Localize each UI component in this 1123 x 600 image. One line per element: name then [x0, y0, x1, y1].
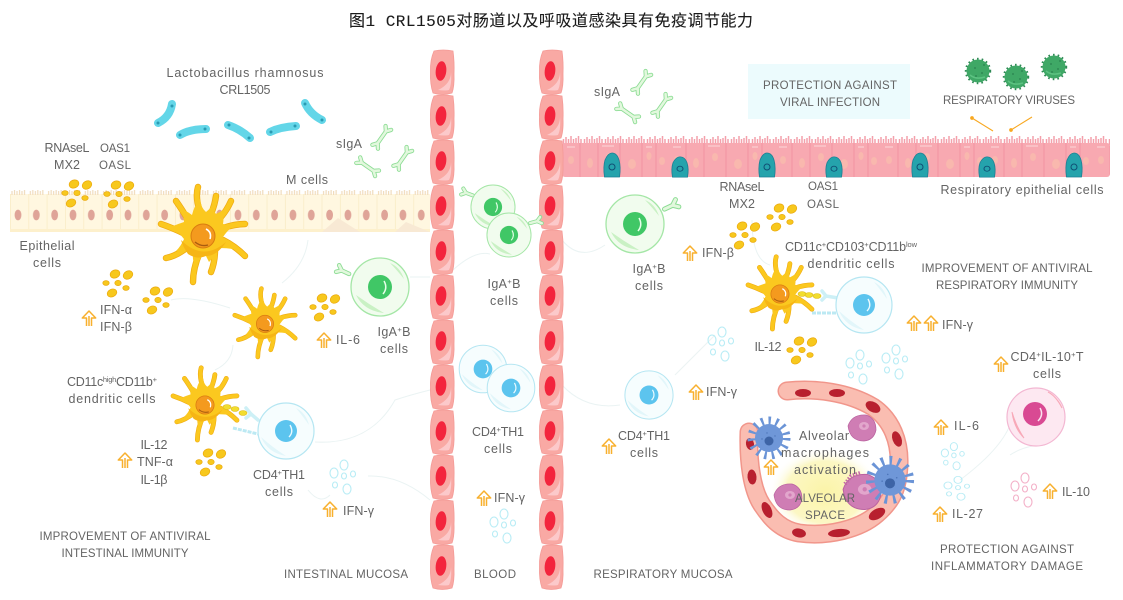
label: alveolar macrophages activation: [781, 429, 869, 477]
heading: improvement of antiviral intestinal immunity: INTESTINAL IMMUNITY: [62, 548, 189, 560]
label: IL-10: [1043, 484, 1090, 499]
label: alveolar macrophages activation: Alveolar: [799, 429, 849, 443]
icons: T cells in blood: [459, 345, 535, 412]
icon: CD4+ IL-10+ T cell: [1007, 388, 1065, 446]
label: CD4+ TH1 cells intestinal: TH1: [282, 468, 305, 482]
label: CD11c high CD11b+ dendritic cells: +: [153, 375, 158, 384]
synapse: dendritic cell and T cell: [173, 368, 314, 459]
label: IL-6: [317, 333, 360, 348]
heading: improvement of antiviral respiratory immunity: [922, 263, 1093, 292]
label: CD4+ TH1 cells intestinal: +: [278, 468, 282, 477]
icon: IgA B cell respiratory: [606, 195, 679, 253]
label: alveolar macrophages activation: activation: [794, 463, 856, 477]
label: IgA+ B cells intestinal: +: [397, 325, 402, 334]
label: respiratory epithelial cells: Respiratory epithelial cells: [940, 183, 1104, 197]
label: IFN-alpha IFN-beta: [82, 303, 132, 334]
label: CD4+ IL-10+ T cells: CD4: [1010, 350, 1036, 364]
label: CD11c+ CD103+ CD11b low dendritic cells: CD103: [826, 240, 864, 254]
alveolar wall: [749, 390, 899, 534]
label: CD11c+ CD103+ CD11b low dendritic cells: dendritic cells: [808, 257, 894, 271]
label: IL-12 TNF-alpha IL-1beta: TNF-α: [137, 455, 173, 469]
label: IFN-gamma blood: [477, 491, 526, 506]
icon: IL-10 rings: [1011, 473, 1036, 507]
icon: T cell respiratory: [625, 371, 673, 419]
title: 图1 CRL1505对肠道以及呼吸道感染具有免疫调节能力: [349, 12, 753, 31]
heading: improvement of antiviral respiratory immunity: IMPROVEMENT OF ANTIVIRAL: [922, 263, 1093, 275]
label: RNAseL MX2 respiratory: RNAseL: [720, 180, 765, 194]
icons: IgA B cells in blood: [461, 185, 542, 257]
cytokines: IL-12 intestinal: [196, 448, 227, 478]
icon: IFN-gamma rings blood: [490, 509, 516, 543]
label: IgA+ B cells blood: cells: [490, 294, 518, 308]
label: CD4+ TH1 cells intestinal: cells: [265, 485, 293, 499]
label: CD4+ TH1 cells intestinal: CD4: [253, 468, 278, 482]
arrows: virus entry: [971, 117, 1032, 131]
heading: intestinal mucosa: INTESTINAL MUCOSA: [284, 569, 408, 581]
label: IgA+ B cells respiratory: +: [652, 262, 657, 271]
label: IgA+ B cells respiratory: B: [657, 262, 666, 276]
label: CD11c high CD11b+ dendritic cells: high: [103, 375, 116, 384]
label: IL-27: IL-27: [952, 507, 983, 521]
label: IgA+ B cells respiratory: IgA: [632, 262, 652, 276]
label: alveolar space: SPACE: [805, 510, 845, 522]
label: CD4+ TH1 cells blood: cells: [484, 442, 512, 456]
label: IgA+ B cells intestinal: IgA: [378, 325, 397, 339]
label: alveolar macrophages activation: macrophages: [781, 446, 869, 460]
label: CD4+ TH1 cells blood: TH1: [501, 425, 524, 439]
label: RNAseL MX2: MX2: [54, 158, 80, 172]
label: IgA+ B cells respiratory: cells: [635, 279, 663, 293]
label: IgA+ B cells blood: B: [512, 277, 520, 291]
callout: protection against viral infection: PROTECTION AGAINST: [763, 80, 897, 92]
label: IgA+ B cells blood: IgA: [488, 277, 507, 291]
label: CD11c+ CD103+ CD11b low dendritic cells: +: [822, 240, 827, 249]
label: IgA+ B cells blood: +: [507, 277, 512, 286]
callout: protection against viral infection: VIRAL INFECTION: [780, 97, 880, 109]
label: IL-12 respiratory: IL-12: [754, 340, 782, 354]
icon: IFN-gamma rings intestinal: [330, 460, 356, 494]
label: CD11c+ CD103+ CD11b low dendritic cells: CD11c: [785, 240, 822, 254]
label: IFN-gamma intestinal: [323, 502, 375, 518]
label: CD4+ IL-10+ T cells: +: [1036, 350, 1041, 359]
panel: alveolus: [745, 389, 908, 539]
label: CD4+ TH1 cells intestinal: [253, 468, 305, 499]
label: IFN-gamma respiratory lower: IFN-γ: [706, 385, 738, 399]
icon: large dendritic cell: [161, 187, 245, 282]
label: IL-6 respiratory: [934, 419, 979, 435]
cytokines: intestinal epithelium: [62, 179, 135, 210]
label: CD11c high CD11b+ dendritic cells: CD11c: [67, 375, 103, 389]
label: IL-10: IL-10: [1062, 485, 1090, 499]
label: CD4+ TH1 cells respiratory: cells: [630, 446, 658, 460]
icons: sIgA antibodies respiratory: [616, 71, 671, 122]
icon: IgA B cell intestinal: [336, 258, 409, 316]
icon: lactobacillus bacteria: [156, 102, 324, 140]
heading: protection against inflammatory damage: INFLAMMATORY DAMAGE: [931, 561, 1083, 573]
label: IL-6: IL-6: [336, 333, 360, 347]
panel: intestinal epithelium: [10, 190, 430, 232]
cytokines: IFN alpha beta: [103, 269, 174, 316]
label: CD4+ IL-10+ T cells: IL-10: [1041, 350, 1071, 364]
label: CD11c+ CD103+ CD11b low dendritic cells: [785, 240, 918, 271]
icons: respiratory viruses: [966, 55, 1066, 89]
label: RNAseL MX2: [44, 141, 90, 172]
blood vessel: right wall: [539, 50, 563, 590]
label: IFN-beta respiratory: IFN-β: [702, 246, 734, 260]
label: OAS1 OASL: OAS1: [100, 143, 130, 155]
label: OAS1 OASL: OASL: [99, 160, 132, 172]
faint connecting lines: [171, 220, 1045, 500]
label: CD4+ TH1 cells blood: CD4: [472, 425, 497, 439]
label: OAS1 OASL: [99, 143, 132, 172]
label: CD11c high CD11b+ dendritic cells: dendritic cells: [68, 392, 156, 406]
synapse: respiratory dendritic cell and T cell: [748, 257, 892, 333]
label: RNAseL MX2 respiratory: MX2: [729, 197, 755, 211]
label: RNAseL MX2 respiratory: [720, 180, 765, 211]
label: CD4+ TH1 cells blood: [472, 425, 524, 456]
arrow: macrophage activation: [764, 460, 778, 475]
heading: improvement of antiviral intestinal immunity: [40, 531, 211, 560]
label: IL-12 TNF-alpha IL-1beta: [118, 438, 173, 487]
blue macrophages: [753, 422, 908, 498]
label: CD4+ IL-10+ T cells: [994, 350, 1084, 381]
label: OAS1 OASL respiratory: OAS1: [808, 181, 838, 193]
label: Lactobacillus rhamnosus CRL1505: Lactobacillus rhamnosus: [166, 66, 324, 80]
label: IgA+ B cells respiratory: [632, 262, 666, 293]
capillary red cells: [745, 389, 904, 539]
label: Lactobacillus rhamnosus CRL1505: CRL1505: [220, 83, 271, 97]
label: CD4+ IL-10+ T cells: cells: [1033, 367, 1061, 381]
label: IgA+ B cells blood: [488, 277, 520, 308]
label: M cells: M cells: [286, 173, 328, 187]
cytokines: respiratory: [730, 203, 798, 251]
label: CD4+ TH1 cells respiratory: CD4: [618, 429, 643, 443]
label: IFN-gamma respiratory upper: [907, 316, 974, 332]
label: IL-12 TNF-alpha IL-1beta: IL-12: [140, 438, 168, 452]
label: Epithelial cells: [20, 239, 74, 270]
icons: sIgA antibodies intestinal: [356, 126, 412, 176]
label: Epithelial cells: cells: [33, 256, 61, 270]
label: Lactobacillus rhamnosus CRL1505: [166, 66, 324, 97]
label: CD11c high CD11b+ dendritic cells: [67, 375, 158, 406]
label: IFN-beta respiratory: [683, 246, 734, 261]
label: IL-6 respiratory: IL-6: [954, 419, 979, 433]
label: OAS1 OASL respiratory: [807, 181, 840, 211]
label: IgA+ B cells intestinal: [378, 325, 410, 356]
label: Epithelial cells: Epithelial: [20, 239, 74, 253]
blood vessel: left wall: [430, 50, 454, 590]
label: IgA+ B cells intestinal: B: [402, 325, 410, 339]
label: CD11c+ CD103+ CD11b low dendritic cells: low: [906, 240, 918, 249]
label: RNAseL MX2: RNAseL: [44, 141, 90, 155]
label: CD4+ TH1 cells respiratory: +: [642, 429, 648, 438]
label: CD11c+ CD103+ CD11b low dendritic cells: CD11b: [869, 240, 906, 254]
label: alveolar space: ALVEOLAR: [795, 493, 855, 505]
label: CD4+ IL-10+ T cells: T: [1076, 350, 1084, 364]
heading: improvement of antiviral respiratory immunity: RESPIRATORY IMMUNITY: [936, 280, 1078, 292]
icons: IFN-gamma rings respiratory: [708, 327, 908, 384]
label: sIgA intestinal: sIgA: [336, 137, 363, 151]
heading: protection against inflammatory damage: [931, 544, 1083, 573]
label: IL-12 TNF-alpha IL-1beta: IL-1β: [140, 473, 168, 487]
cytokines: IL-12 respiratory: [787, 336, 818, 366]
label: CD4+ TH1 cells respiratory: TH1: [647, 429, 670, 443]
label: IFN-gamma respiratory lower: [689, 385, 738, 400]
icon: dendritic cell middle: [235, 289, 295, 357]
heading: protection against inflammatory damage: PROTECTION AGAINST: [940, 544, 1074, 556]
label: CD11c+ CD103+ CD11b low dendritic cells: +: [864, 240, 869, 249]
heading: blood: BLOOD: [474, 569, 516, 581]
label: sIgA respiratory: sIgA: [594, 85, 621, 99]
callout: protection against viral infection: [748, 64, 910, 119]
pink alveolar macrophages: [774, 415, 881, 510]
label: CD4+ IL-10+ T cells: +: [1071, 350, 1076, 359]
label: IgA+ B cells intestinal: cells: [380, 342, 408, 356]
cytokines: IL-6: [310, 293, 341, 323]
label: alveolar space: [795, 493, 855, 522]
icons: IL-6 and IL-27 rings: [941, 443, 970, 500]
goblet cells: [604, 153, 1082, 177]
label: CD4+ TH1 cells blood: +: [496, 425, 502, 434]
label: IFN-gamma intestinal: IFN-γ: [343, 504, 375, 518]
heading: respiratory mucosa: RESPIRATORY MUCOSA: [594, 569, 733, 581]
label: IFN-gamma respiratory upper: IFN-γ: [942, 318, 974, 332]
label: IFN-gamma blood: IFN-γ: [494, 491, 526, 505]
heading: improvement of antiviral intestinal immunity: IMPROVEMENT OF ANTIVIRAL: [40, 531, 211, 543]
label: IFN-alpha IFN-beta: IFN-α: [100, 303, 132, 317]
label: OAS1 OASL respiratory: OASL: [807, 199, 840, 211]
label: IFN-alpha IFN-beta: IFN-β: [100, 320, 132, 334]
label: IL-27: [933, 507, 983, 522]
label: respiratory viruses: RESPIRATORY VIRUSES: [943, 95, 1075, 107]
panel: respiratory epithelium: [562, 136, 1110, 177]
label: CD11c high CD11b+ dendritic cells: CD11b: [116, 375, 153, 389]
label: CD4+ TH1 cells respiratory: [602, 429, 670, 460]
